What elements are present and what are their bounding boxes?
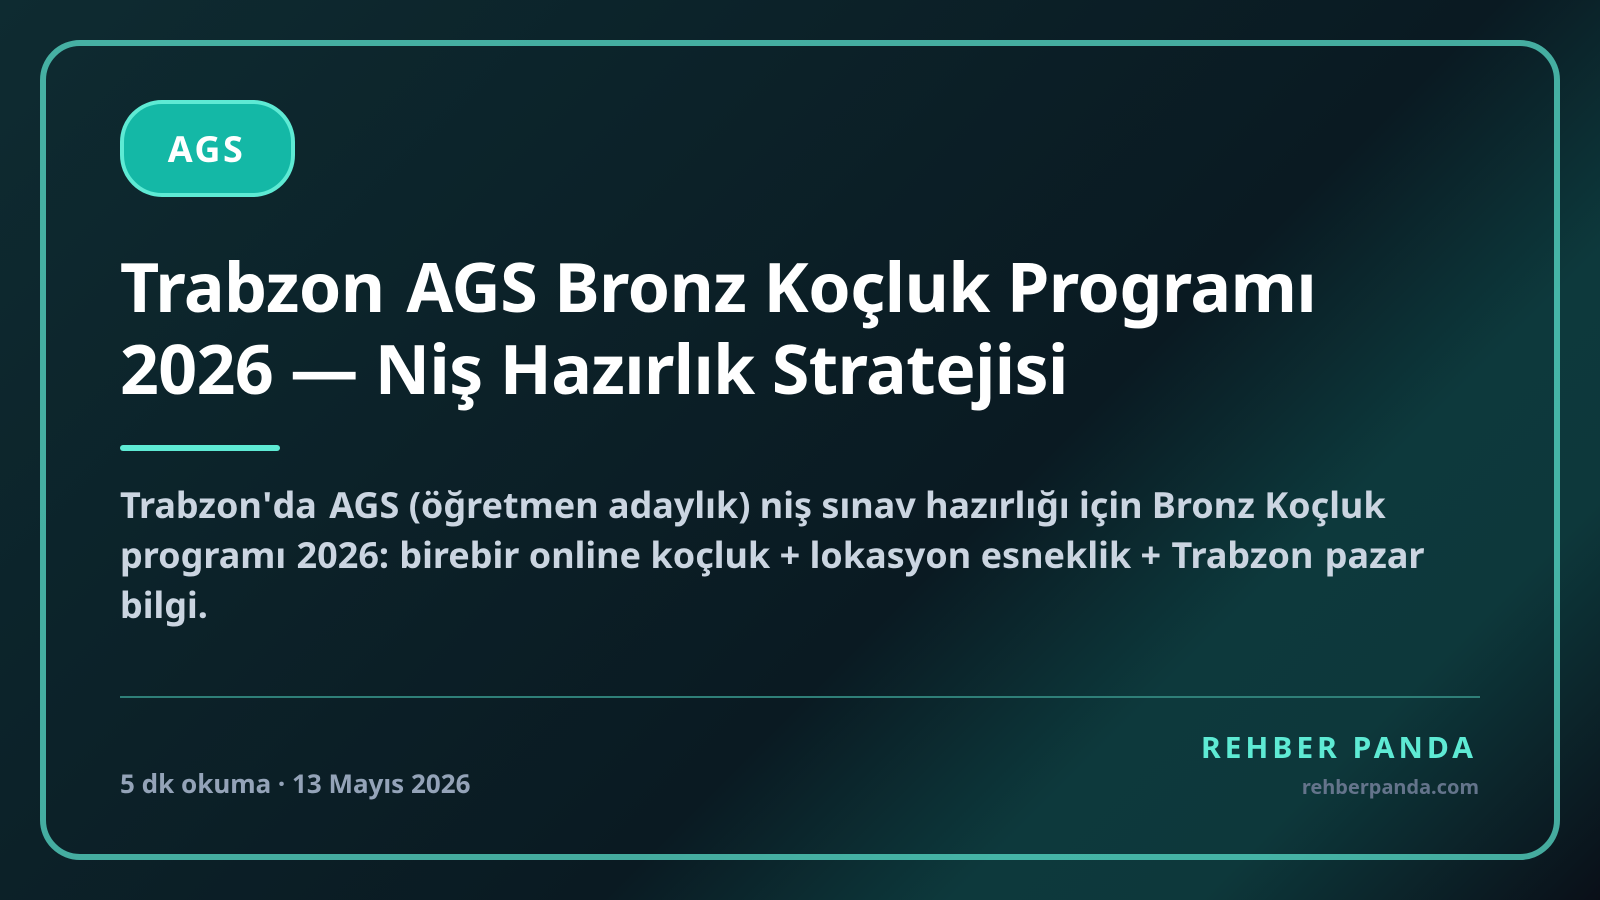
description text <box>120 480 1425 629</box>
website: rehberpanda.com <box>1302 773 1479 800</box>
title: 2026 — Niş Hazırlık Stratejisi <box>120 321 1068 414</box>
title <box>120 239 1316 414</box>
accent bar <box>120 445 280 451</box>
description text: programı 2026: birebir online koçluk + lokasyon esneklik + Trabzon pazar <box>120 530 1425 579</box>
title: Trabzon AGS Bronz Koçluk Programı <box>120 239 1316 332</box>
badge: AGS: AGS <box>168 124 245 173</box>
reading time and date: 5 dk okuma · 13 Mayıs 2026 <box>120 765 470 801</box>
brand name: REHBER PANDA <box>1201 726 1477 767</box>
footer divider <box>120 696 1480 698</box>
description text: bilgi. <box>120 580 208 629</box>
description text: Trabzon'da AGS (öğretmen adaylık) niş sınav hazırlığı için Bronz Koçluk <box>120 480 1386 529</box>
badge: AGS <box>120 100 295 197</box>
